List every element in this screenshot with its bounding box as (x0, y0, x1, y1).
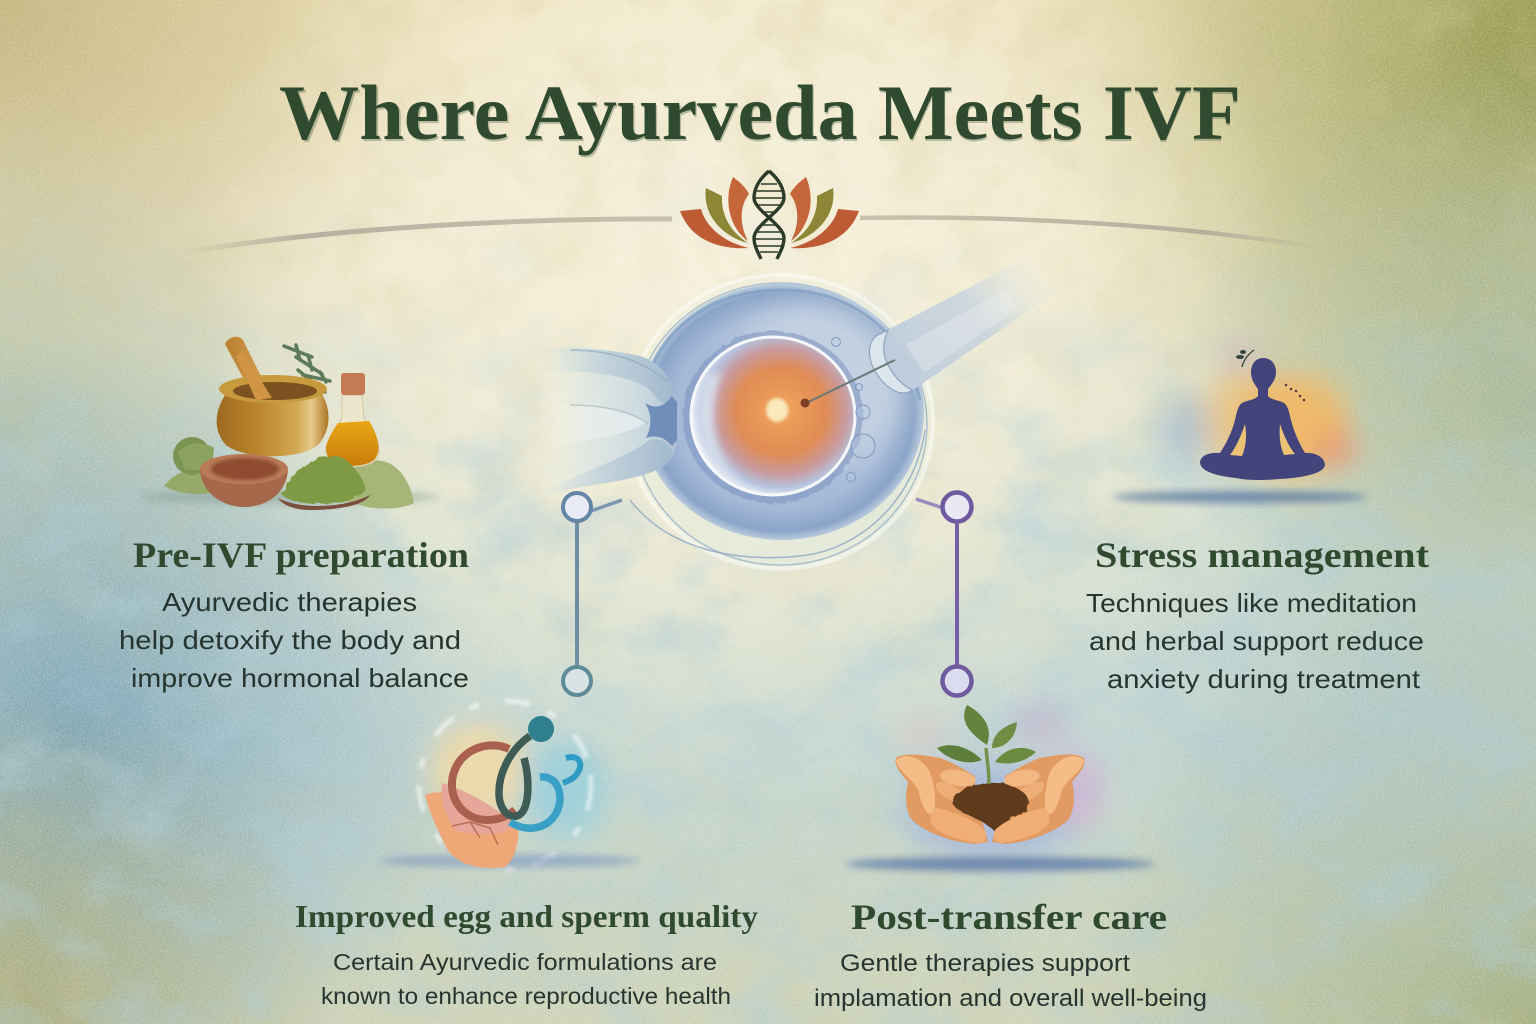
central illustration: ICSI egg in dish (538, 248, 1062, 569)
egg outer membrane (683, 331, 863, 503)
blue arc (510, 777, 560, 828)
dish lower rim (630, 430, 925, 558)
figure (1200, 358, 1325, 480)
watercolor aura (1161, 341, 1357, 475)
text: Post-transfer care body (814, 950, 1207, 1012)
hand (425, 783, 518, 868)
text: Post-transfer care body: Gentle therapies support (840, 950, 1130, 977)
right hand base (992, 755, 1085, 844)
holding pipette (538, 347, 677, 498)
text: Stress management body: Techniques like meditation (1086, 588, 1417, 618)
small blue arrow (563, 757, 580, 783)
injection tube (868, 248, 1062, 393)
heading: Stress management: Stress management (1095, 535, 1429, 575)
heading: Post-transfer care: Post-transfer care (851, 897, 1167, 937)
seedling (937, 705, 1036, 784)
text: Improved egg and sperm quality body: Certain Ayurvedic formulations are (333, 949, 717, 975)
mortar opening (233, 382, 317, 400)
herb sprig (284, 345, 330, 392)
mortar pestle (225, 337, 272, 402)
icon: meditation silhouette (1112, 341, 1368, 503)
egg nucleus highlight (766, 398, 788, 422)
mortar body (217, 388, 328, 456)
connector line left (575, 521, 579, 667)
node: upper left (563, 493, 591, 521)
title: Where Ayurveda Meets IVF (281, 71, 1241, 158)
needle tip (800, 398, 810, 408)
watercolor aura (895, 703, 1105, 858)
mortar rim (219, 375, 327, 403)
title: Where Ayurveda Meets IVF (279, 69, 1241, 156)
text: Stress management body (1086, 588, 1424, 694)
icon: mortar, herbs and oil (140, 337, 440, 510)
dark sperm symbol (499, 736, 530, 816)
lotus petals left (680, 177, 749, 248)
dish texture (725, 300, 905, 470)
figure arm gap left (1230, 424, 1246, 456)
watercolor aura (430, 722, 607, 840)
text: Pre-IVF preparation body: improve hormonal balance (131, 663, 469, 693)
text: Pre-IVF preparation body: help detoxify the body and (119, 625, 461, 655)
node: lower left (563, 667, 591, 695)
ground shadow (1112, 491, 1368, 503)
connector: left, dish to stem (577, 500, 622, 667)
dish outer rim (627, 275, 933, 569)
oil bottle (326, 373, 379, 467)
curved divider line left (180, 219, 672, 253)
text: Stress management body: anxiety during treatment (1107, 664, 1421, 694)
text: Pre-IVF preparation body (119, 587, 469, 693)
specks (1285, 384, 1305, 401)
icon: lotus with DNA helix (680, 171, 859, 259)
injection needle (802, 360, 895, 405)
connector line right (955, 522, 959, 666)
left leaves (164, 437, 218, 494)
green herb pile (282, 455, 366, 504)
ground shadow (140, 490, 440, 504)
heading: Improved egg and sperm quality: Improved egg and sperm quality (295, 898, 758, 934)
dish blue disk (640, 284, 924, 540)
bubbles (832, 338, 875, 482)
splash ring (419, 701, 591, 869)
node: lower right (942, 666, 972, 696)
left hand base (895, 755, 988, 844)
right leaves (345, 460, 414, 509)
dish inner rim (645, 290, 920, 400)
node: upper right (942, 492, 972, 522)
curved divider line right (860, 218, 1320, 248)
soil (952, 783, 1030, 833)
text: Pre-IVF preparation body: Ayurvedic therapies (162, 587, 417, 617)
egg (691, 337, 855, 495)
icon: hands holding seedling (845, 703, 1155, 871)
icon: egg and sperm symbols in hand (380, 701, 640, 869)
pestle in mortar (236, 352, 272, 400)
ground shadow (845, 857, 1155, 871)
text: Improved egg and sperm quality body (321, 949, 731, 1009)
ground shadow (380, 855, 640, 867)
lotus petals right (790, 177, 859, 248)
right hand fingers (994, 756, 1084, 843)
figure arm gap right (1280, 424, 1295, 455)
small leaves above head (1236, 350, 1254, 367)
text: Stress management body: and herbal support reduce (1089, 626, 1424, 656)
wooden bowl (200, 454, 288, 507)
text: Improved egg and sperm quality body: known to enhance reproductive health (321, 983, 731, 1009)
sperm head (528, 716, 554, 742)
heading: Pre-IVF preparation: Pre-IVF preparation (133, 535, 469, 575)
egg left pale shading (699, 372, 745, 487)
connector: right, dish to stem (916, 499, 957, 666)
plate (278, 495, 370, 510)
left hand fingers (896, 756, 986, 843)
egg ring (452, 745, 515, 820)
text: Post-transfer care body: implamation and overall well-being (814, 985, 1207, 1012)
DNA helix (754, 171, 784, 259)
